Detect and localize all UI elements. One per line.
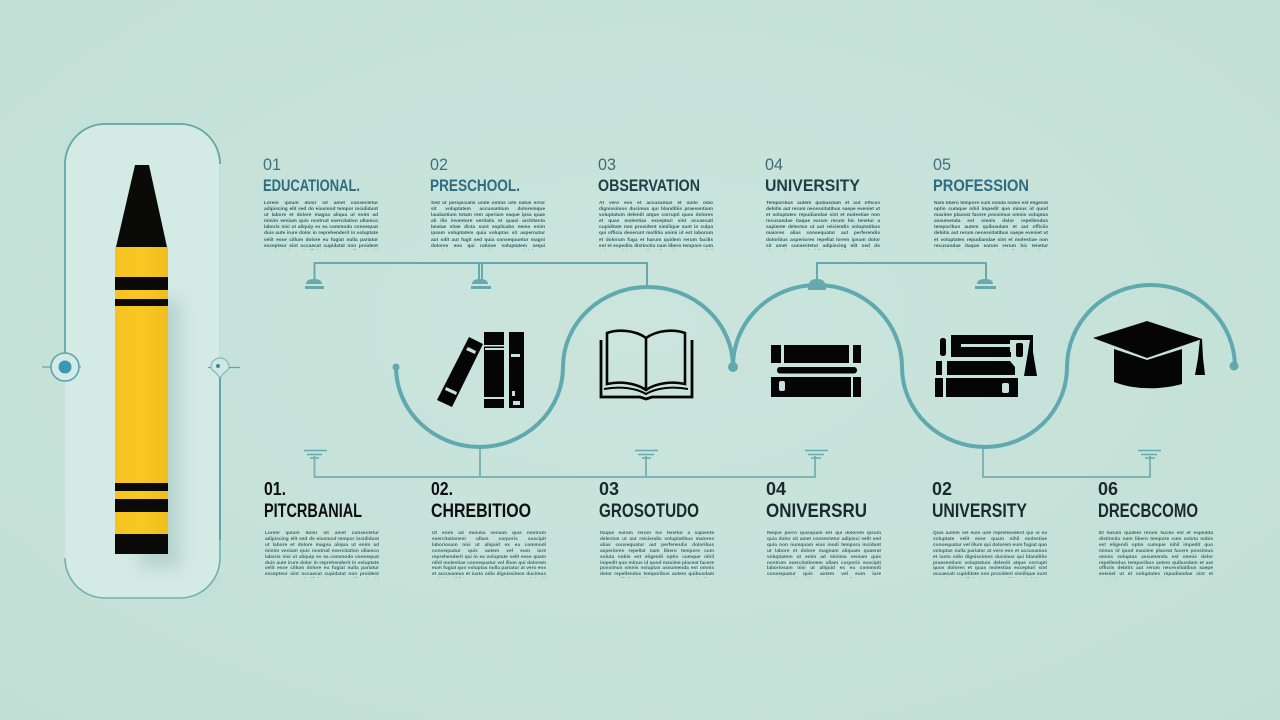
bottom connectors	[304, 449, 1161, 477]
icon: leaning books	[437, 332, 524, 408]
top block 4: university	[765, 155, 880, 250]
bottom block 2: CHREBITIOO	[431, 501, 531, 522]
top block 5: profession	[933, 155, 1048, 250]
bottom block 4: 04	[766, 479, 786, 499]
top connectors	[305, 263, 996, 290]
bottom block 3	[599, 479, 714, 578]
bottom block 6: 06	[1098, 479, 1118, 499]
top block 1: educational: 01	[263, 155, 281, 174]
top block 3: observation	[598, 155, 713, 250]
panel: crayon card	[65, 124, 220, 598]
bottom block 3: 03	[599, 479, 619, 499]
top block 4: university: 04	[765, 155, 783, 174]
bottom block 6: DRECBCOMO	[1098, 501, 1198, 522]
top block 4: university: UNIVERSITY	[765, 176, 861, 195]
top block 2: preschool: PRESCHOOL.	[430, 176, 520, 195]
bottom block 5: university: 02	[932, 479, 952, 499]
top block 5: profession: 05	[933, 155, 951, 174]
top block 1: educational: EDUCATIONAL.	[263, 176, 360, 195]
bottom block 1: preschool: PITCRBANIAL	[264, 501, 362, 522]
bottom block 1: preschool	[264, 479, 379, 578]
bottom block 2	[431, 479, 546, 578]
bottom block 5: university	[932, 479, 1047, 578]
timeline curve	[396, 285, 1235, 447]
icon: open book	[601, 331, 692, 399]
bottom block 4	[766, 479, 881, 578]
icon: book stack with tassel	[935, 335, 1037, 397]
bottom block 6	[1098, 479, 1213, 578]
right node	[208, 358, 240, 377]
icon: graduation cap	[1093, 321, 1205, 388]
top block 2: preschool	[430, 155, 545, 250]
bottom block 2: 02.	[431, 479, 453, 499]
top block 5: profession: PROFESSION	[933, 176, 1029, 195]
bottom block 1: preschool: 01.	[264, 479, 286, 499]
bottom block 4: ONIVERSRU	[766, 501, 867, 522]
top block 2: preschool: 02	[430, 155, 448, 174]
bottom block 3: GROSOTUDO	[599, 501, 699, 522]
crayon	[115, 165, 180, 568]
bottom block 5: university: UNIVERSITY	[932, 501, 1027, 522]
top block 3: observation: 03	[598, 155, 616, 174]
top block 3: observation: OBSERVATION	[598, 176, 700, 195]
top block 1: educational	[263, 155, 378, 250]
curve end dots	[392, 362, 1238, 372]
left node	[42, 353, 81, 381]
icon: flat book stack	[771, 345, 861, 397]
